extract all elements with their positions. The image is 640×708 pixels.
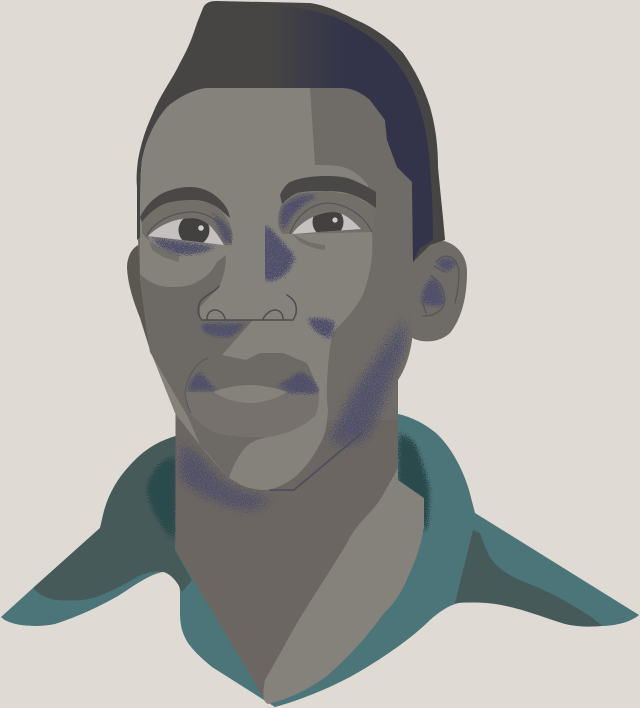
left eye (140, 187, 234, 262)
ear base (412, 240, 467, 341)
shirt right shadow (455, 530, 602, 627)
right highlight (332, 217, 338, 223)
hair navy sheen (268, 5, 433, 262)
hair (137, 1, 445, 262)
neck (176, 420, 424, 704)
left nostril (207, 310, 225, 319)
under nose stipple (198, 321, 254, 340)
neck crease line (270, 433, 362, 490)
shirt right collar shadow (396, 424, 432, 540)
chin mid plane (185, 392, 319, 437)
left eye white (148, 218, 224, 245)
right eye (278, 176, 376, 250)
neck stipple shadow (176, 436, 282, 518)
shirt left shadow (33, 436, 192, 601)
left lid stipple (205, 206, 234, 246)
shirt (1, 414, 639, 707)
head (127, 1, 467, 490)
neck base (176, 380, 398, 704)
right socket stipple (278, 191, 322, 238)
left lower lid stipple (146, 234, 224, 257)
nose bridge stipple (265, 224, 298, 283)
ear folds (423, 256, 459, 316)
shirt left collar deep shadow (143, 453, 176, 542)
lip outline (185, 358, 208, 413)
face light plane (140, 88, 372, 490)
nose (198, 286, 296, 320)
head base (138, 88, 416, 420)
right jaw stipple (322, 310, 412, 453)
left ear (127, 240, 150, 350)
right ear (412, 240, 467, 341)
nose outline (198, 286, 296, 320)
left eyebrow (140, 187, 230, 222)
cheek and jaw shadow (140, 255, 319, 478)
left iris (178, 218, 210, 242)
right iris (312, 212, 344, 232)
right eyebrow (280, 176, 376, 208)
right socket (278, 191, 376, 250)
shirt base (1, 414, 639, 707)
left socket (142, 200, 232, 262)
right eye white (292, 212, 361, 234)
mouth opening (213, 385, 287, 403)
lip stipple (184, 368, 322, 406)
ear shading (418, 256, 456, 308)
neck light strip (263, 468, 424, 704)
right nostril (263, 310, 283, 319)
left upper lid line (147, 212, 231, 243)
cheek stipple (304, 315, 338, 342)
left highlight (198, 225, 204, 231)
right upper lid line (290, 203, 372, 234)
